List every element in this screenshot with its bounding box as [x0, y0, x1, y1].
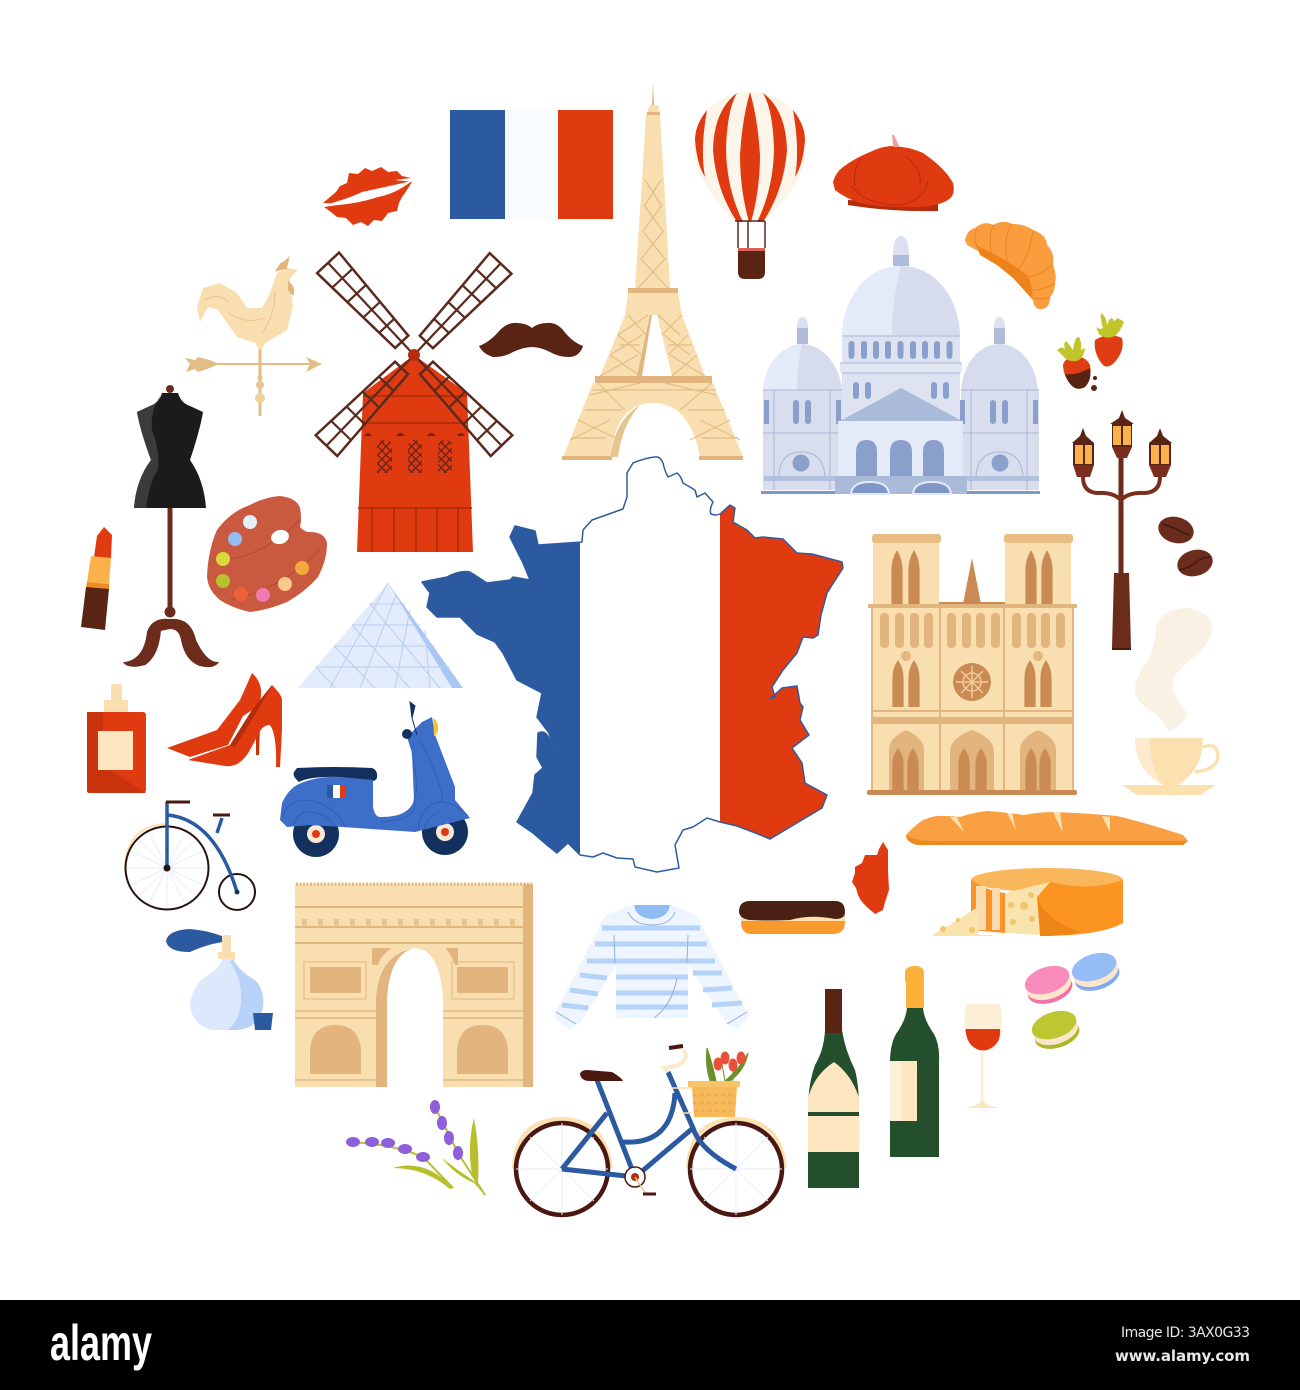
icon: lipstick kiss: [323, 167, 412, 226]
Notre-Dame cathedral: [867, 534, 1077, 795]
penny-farthing bicycle: [125, 802, 255, 910]
France map in tricolour: [421, 456, 844, 873]
striped sailor shirt: [553, 905, 749, 1030]
coffee cup: [1122, 738, 1218, 795]
windmill: Moulin Rouge: [316, 253, 512, 552]
wine glass: [964, 1004, 1002, 1108]
green wine bottle: [890, 966, 939, 1157]
island of Corsica: [852, 842, 889, 914]
hot air balloon: [694, 92, 806, 279]
bicycle with flower basket: [514, 1046, 785, 1215]
image id: Image ID: 3AX0G33: [1121, 1325, 1250, 1341]
lipstick: [81, 527, 112, 630]
steam: [1135, 608, 1212, 732]
dress mannequin: [125, 385, 217, 666]
artist palette: [207, 496, 327, 612]
moustache: [479, 323, 583, 357]
beret: [833, 135, 954, 211]
red high heels: [167, 673, 282, 767]
perfume bottle: [87, 684, 146, 793]
macarons: [1021, 948, 1123, 1054]
Sacre-Coeur basilica: [761, 236, 1040, 494]
footer band: [0, 1300, 1300, 1390]
strawberries: [1057, 313, 1124, 391]
coffee beans: [1155, 513, 1216, 580]
Eiffel Tower: [562, 83, 743, 460]
baguette: [906, 811, 1188, 845]
eclair: [739, 901, 845, 934]
lavender sprigs: [346, 1100, 485, 1195]
weather vane rooster: [185, 259, 322, 416]
blue scooter: [280, 702, 470, 857]
champagne bottle: [808, 989, 859, 1188]
cheese wheel and wedge: [933, 868, 1123, 936]
flag of France: [450, 110, 613, 219]
perfume atomizer: [166, 929, 273, 1030]
website: www.alamy.com: [1115, 1347, 1250, 1365]
croissant: [965, 222, 1056, 309]
alamy logo text: alamy: [50, 1315, 152, 1371]
Arc de Triomphe: [295, 884, 533, 1087]
Louvre pyramid: [298, 583, 463, 688]
street lamp: [1072, 410, 1172, 650]
